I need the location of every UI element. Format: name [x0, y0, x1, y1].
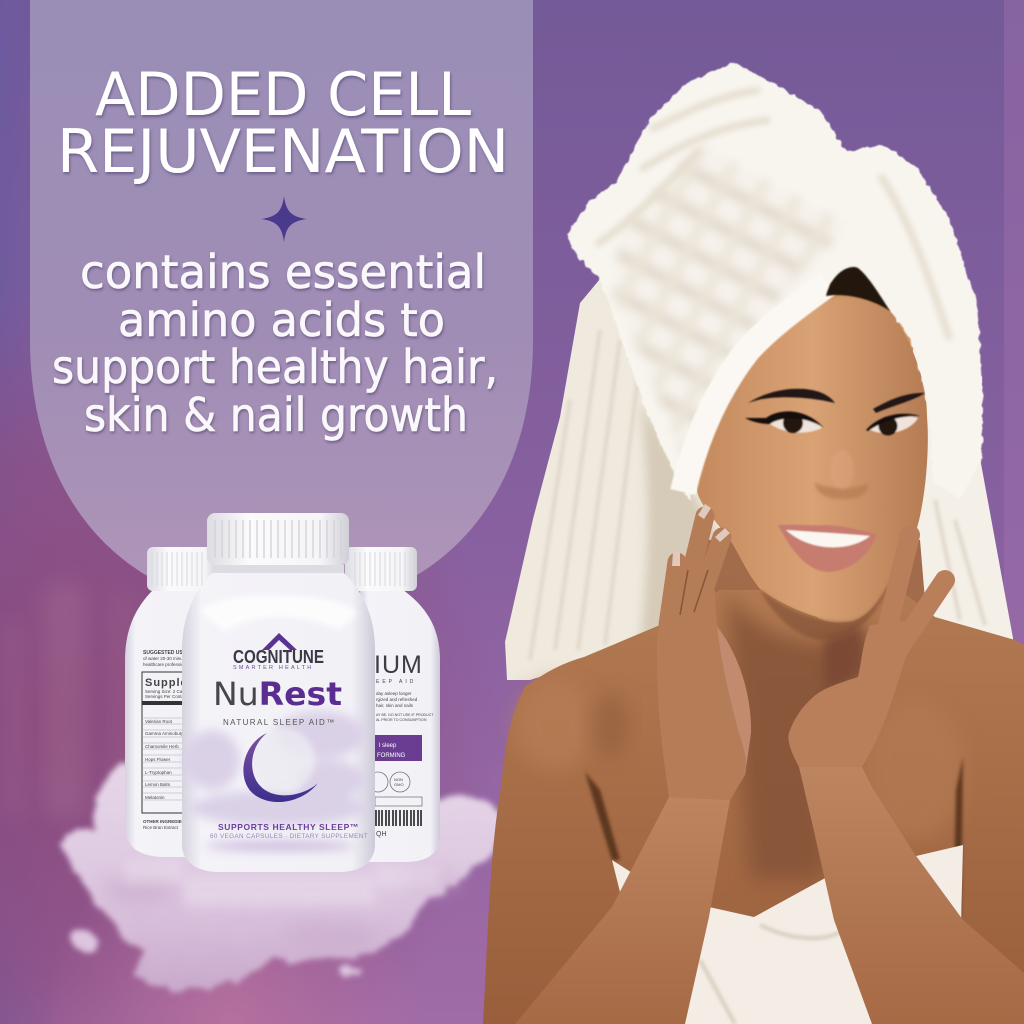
moon disc	[251, 728, 315, 792]
bottle cloud art	[184, 711, 366, 851]
left finger gaps	[680, 570, 708, 615]
left palm	[702, 610, 751, 775]
armpit shadows	[585, 757, 963, 917]
nose	[815, 450, 868, 499]
body text: skin & nail growth	[84, 388, 468, 442]
label text: supplement facts: SUGGESTED USE: Take	[143, 650, 200, 656]
label text: product claims: l sleep	[379, 743, 397, 749]
panel: headline arch	[30, 0, 533, 610]
label text: product claims: NON	[394, 777, 403, 782]
icon: crescent moon	[243, 733, 318, 802]
left fingernails	[672, 504, 730, 566]
bottle highlight	[200, 595, 358, 632]
bottle: front NuRest	[182, 513, 375, 872]
torso and shoulders	[483, 590, 1024, 1024]
towel: turban	[567, 62, 982, 500]
label text: supplement facts: Hops Flower	[145, 757, 171, 762]
woman with towel	[483, 62, 1024, 1024]
label text: supplement facts	[142, 650, 200, 830]
bottle: back left	[125, 547, 230, 857]
product name: NuRest	[213, 675, 342, 713]
right fingers shadow	[824, 625, 862, 690]
right forearm	[799, 767, 1024, 1024]
label text: supplement facts: healthcare professional.	[143, 662, 191, 667]
towel: waffle ridges	[613, 144, 850, 470]
label text: product claims: EEP AID	[376, 679, 416, 685]
bottle reflection	[124, 860, 440, 905]
right chest tone	[865, 700, 965, 840]
product descriptor: NATURAL SLEEP AID™	[223, 718, 336, 727]
towel: chest wrap	[612, 845, 963, 1024]
label text: product claims: hair, skin and nails	[376, 703, 414, 708]
clouds	[62, 763, 502, 989]
right hand	[788, 535, 945, 767]
chin shadow	[760, 576, 893, 640]
body text: contains essential	[80, 245, 486, 299]
brand tagline: SMARTER HEALTH	[233, 665, 313, 671]
eyebrows	[748, 389, 925, 413]
label text: product claims: FORMING	[377, 753, 406, 759]
mouth	[778, 525, 877, 572]
label text: supplement facts: Gamma Aminobutyric	[145, 731, 189, 736]
face	[697, 299, 928, 622]
body text: support healthy hair,	[52, 340, 498, 394]
label text: product claims: rgized and refreshed	[376, 697, 418, 702]
label text: product claims: QH	[376, 831, 386, 838]
title	[57, 60, 509, 187]
title: ADDED CELL	[95, 60, 472, 130]
towel: face band	[683, 284, 828, 492]
neck shadow	[725, 590, 880, 880]
towel: hanging drape	[505, 279, 1013, 680]
towel fold shadows	[700, 925, 850, 1024]
body text	[52, 245, 498, 442]
label text: supplement facts: Rice Bran Extract	[143, 825, 179, 830]
label text: product claims: AY BE. DO NOT USE IF PRODUCT	[376, 713, 434, 717]
label text: product claims	[368, 651, 434, 838]
label text: supplement facts: Serving Size: 2 Capsules	[145, 689, 196, 694]
brand wordmark: COGNITUNE	[233, 647, 324, 667]
eyes	[745, 411, 920, 436]
label text: supplement facts: Lemon Balm	[145, 782, 171, 787]
label text: product claims: IUM	[374, 651, 423, 679]
left hand	[657, 504, 746, 800]
hair	[826, 267, 890, 311]
neck base	[680, 540, 930, 660]
label text: supplement facts: Supple	[145, 677, 188, 689]
icon: logo roof	[262, 633, 297, 650]
left shoulder shadow	[590, 693, 630, 757]
body text: amino acids to	[118, 293, 445, 347]
left forearm	[515, 797, 730, 1024]
label text: supplement facts: Servings Per Container	[145, 694, 192, 699]
title: REJUVENATION	[57, 117, 509, 187]
claim: SUPPORTS HEALTHY SLEEP™	[218, 822, 359, 832]
label text: product claims: GMO	[394, 782, 404, 787]
label text: supplement facts: Melatonin	[145, 795, 165, 800]
label text: supplement facts: L-Tryptophan	[145, 770, 172, 775]
towel: upper ridges	[596, 90, 950, 340]
capsule count: 60 VEGAN CAPSULES · DIETARY SUPPLEMENT	[210, 833, 368, 840]
label text: product claims: day asleep longer	[376, 691, 412, 696]
cloud shading	[100, 870, 460, 947]
forehead base under towel	[715, 270, 915, 420]
icon: four-point star	[261, 196, 307, 242]
label text: supplement facts: OTHER INGREDIENTS:	[143, 819, 193, 824]
label text: supplement facts: of water 20-30 minutes	[143, 656, 190, 661]
left shoulder highlight	[515, 680, 595, 770]
bottle: back right	[345, 547, 440, 862]
label text: supplement facts: Valerian Root	[145, 719, 173, 724]
label text: product claims: AL PRIOR TO CONSUMPTION	[376, 718, 427, 722]
label text: supplement facts: Chamomile Herb	[145, 744, 179, 749]
